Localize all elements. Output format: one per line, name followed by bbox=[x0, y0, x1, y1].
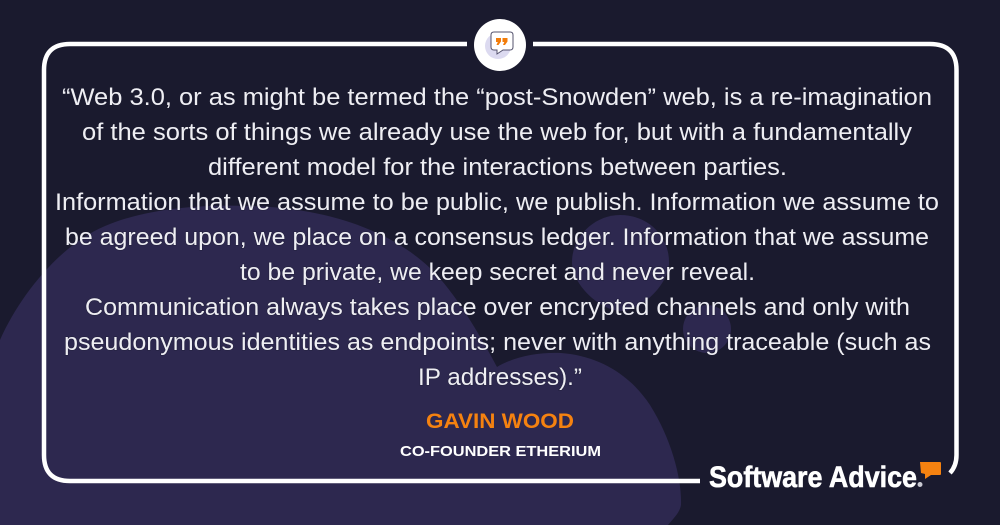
quote text bbox=[55, 84, 939, 391]
quote text: Communication always takes place over encrypted channels and only with bbox=[85, 294, 910, 321]
quote text: “Web 3.0, or as might be termed the “post-Snowden” web, is a re-imagination bbox=[62, 84, 932, 111]
quote text: IP addresses).” bbox=[418, 364, 582, 391]
author name: GAVIN WOOD bbox=[426, 410, 574, 433]
quote frame bbox=[44, 44, 956, 481]
logo: Software Advice: Software Advice bbox=[709, 461, 917, 494]
quote text: Information that we assume to be public, we publish. Information we assume to bbox=[55, 189, 939, 216]
quote text: pseudonymous identities as endpoints; never with anything traceable (such as bbox=[64, 329, 931, 356]
quote text: different model for the interactions between parties. bbox=[208, 154, 787, 181]
background blobs bbox=[0, 206, 731, 525]
author title: CO-FOUNDER ETHERIUM bbox=[400, 443, 601, 460]
icon: speech bubble badge bbox=[474, 19, 526, 71]
quote text: be agreed upon, we place on a consensus ledger. Information that we assume bbox=[65, 224, 929, 251]
quote text: of the sorts of things we already use the web for, but with a fundamentally bbox=[82, 119, 912, 146]
quote text: to be private, we keep secret and never reveal. bbox=[240, 259, 755, 286]
